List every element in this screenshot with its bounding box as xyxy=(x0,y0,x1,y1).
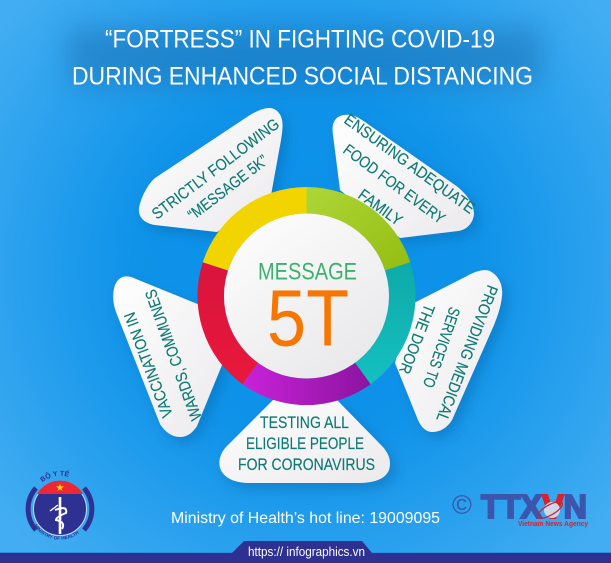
logo: Ministry of Health xyxy=(26,470,94,540)
title: DURING ENHANCED SOCIAL DISTANCING xyxy=(72,62,533,90)
hotline text: Ministry of Health’s hot line: 19009095 xyxy=(171,510,440,527)
panel: strictly following message 5K: STRICTLY FOLLOWING xyxy=(149,116,283,223)
panel: ensuring adequate food: ENSURING ADEQUATE xyxy=(341,111,478,218)
center circle: message 5T xyxy=(224,214,389,378)
panel: vaccination in wards, communes: WARDS, COMMUNES xyxy=(143,287,206,422)
center circle: message 5T: 5T xyxy=(267,274,349,362)
panel: testing all eligible people xyxy=(219,400,390,483)
title xyxy=(68,26,542,90)
panel: providing medical services: PROVIDING MEDICAL xyxy=(432,283,500,424)
center circle: message 5T: MESSAGE xyxy=(258,258,357,286)
logo: Ministry of Health: BỘ Y TẾ xyxy=(40,470,70,482)
panel: testing all eligible people: ELIGIBLE PEOPLE xyxy=(246,435,364,453)
panel: testing all eligible people: FOR CORONAVIRUS xyxy=(238,456,375,474)
panel: providing medical services xyxy=(395,270,502,432)
title: “FORTRESS” IN FIGHTING COVID-19 xyxy=(105,26,495,54)
footer bar with url: https:// infographics.vn xyxy=(248,544,365,559)
panel: vaccination in wards, communes: VACCINATION IN xyxy=(122,310,177,420)
ring chart xyxy=(197,187,416,405)
logo: TTXVN: TTXVN xyxy=(481,488,587,525)
footer bar with url xyxy=(0,541,611,563)
panel: providing medical services: SERVICES TO xyxy=(419,305,462,390)
panel: providing medical services: THE DOOR xyxy=(395,302,437,376)
logo: Ministry of Health: MINISTRY OF HEALTH xyxy=(36,524,79,540)
logo: TTXVN: Vietnam News Agency xyxy=(518,521,588,528)
logo: TTXVN: © xyxy=(452,490,472,520)
panel: ensuring adequate food: FOOD FOR EVERY xyxy=(340,142,448,228)
panel: strictly following message 5K: “MESSAGE 5K” xyxy=(185,152,272,224)
panel: vaccination in wards, communes xyxy=(113,276,222,437)
panel: testing all eligible people: TESTING ALL xyxy=(260,414,349,432)
panel: ensuring adequate food: FAMILY xyxy=(355,186,405,230)
